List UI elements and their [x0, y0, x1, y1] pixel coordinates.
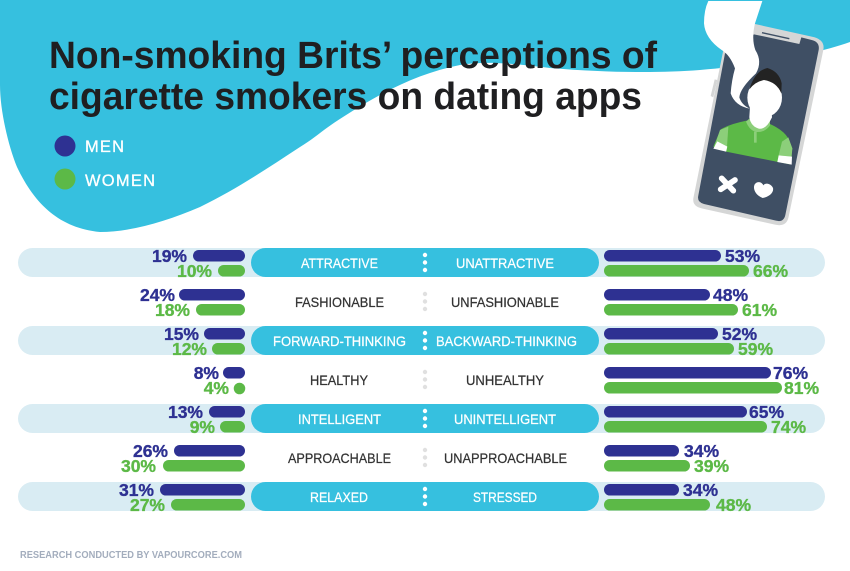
source note: RESEARCH CONDUCTED BY VAPOURCORE.COM [20, 549, 242, 561]
row: attractive: 66% [753, 261, 788, 281]
row: attractive: 53% [725, 246, 760, 266]
center highlights [251, 248, 599, 511]
title: cigarette smokers on dating apps [49, 76, 642, 118]
title [49, 35, 657, 118]
row: forward-thinking [164, 324, 773, 359]
row: healthy: 81% [784, 378, 819, 398]
row: relaxed: 31% [119, 480, 154, 500]
row: intelligent: 9% [190, 417, 215, 437]
phone illustration [693, 1, 824, 225]
row: healthy: UNHEALTHY [466, 372, 545, 388]
row: forward-thinking: 12% [172, 339, 207, 359]
row: fashionable: UNFASHIONABLE [451, 294, 559, 310]
row: healthy: 4% [204, 378, 229, 398]
row: attractive [152, 246, 788, 281]
row: fashionable [140, 285, 777, 320]
row: relaxed [119, 480, 751, 515]
row: fashionable: 24% [140, 285, 175, 305]
row: approachable: 30% [121, 456, 156, 476]
row: healthy [194, 363, 819, 398]
row: relaxed: 48% [716, 495, 751, 515]
row: relaxed: STRESSED [473, 489, 537, 505]
row: relaxed: 27% [130, 495, 165, 515]
row: relaxed: 34% [683, 480, 718, 500]
legend: MEN [85, 138, 124, 156]
row bands [18, 248, 825, 511]
background blue blob [0, 0, 850, 232]
row: approachable: 26% [133, 441, 168, 461]
profile person [713, 68, 792, 165]
row: intelligent: UNINTELLIGENT [454, 411, 556, 427]
phone body [693, 24, 824, 225]
icon: heart [754, 182, 773, 198]
row: approachable: 34% [684, 441, 719, 461]
row: intelligent: 74% [771, 417, 806, 437]
row: attractive: 19% [152, 246, 187, 266]
row: intelligent: 13% [168, 402, 203, 422]
row: fashionable: 18% [155, 300, 190, 320]
row: intelligent [168, 402, 806, 437]
row: approachable: APPROACHABLE [288, 450, 391, 466]
row: fashionable: 48% [713, 285, 748, 305]
row: intelligent: INTELLIGENT [298, 411, 381, 427]
row: approachable: 39% [694, 456, 729, 476]
row: healthy: 8% [194, 363, 219, 383]
row: attractive: 10% [177, 261, 212, 281]
legend: WOMEN [85, 172, 155, 190]
row: forward-thinking: 59% [738, 339, 773, 359]
row: healthy: HEALTHY [310, 372, 369, 388]
row: healthy: 76% [773, 363, 808, 383]
row: attractive: ATTRACTIVE [301, 255, 378, 271]
row: forward-thinking: 52% [722, 324, 757, 344]
icon: reject cross [721, 178, 735, 191]
row: forward-thinking: FORWARD-THINKING [273, 333, 406, 349]
smoke [704, 1, 762, 109]
title: Non-smoking Brits’ perceptions of [49, 35, 657, 77]
row: relaxed: RELAXED [310, 489, 368, 505]
row: forward-thinking: 15% [164, 324, 199, 344]
legend [54, 136, 155, 190]
row: forward-thinking: BACKWARD-THINKING [436, 333, 577, 349]
row: fashionable: FASHIONABLE [295, 294, 384, 310]
row: attractive: UNATTRACTIVE [456, 255, 554, 271]
row: intelligent: 65% [749, 402, 784, 422]
row: approachable: UNAPPROACHABLE [444, 450, 567, 466]
row: approachable [121, 441, 729, 476]
row: fashionable: 61% [742, 300, 777, 320]
phone screen [698, 34, 819, 221]
